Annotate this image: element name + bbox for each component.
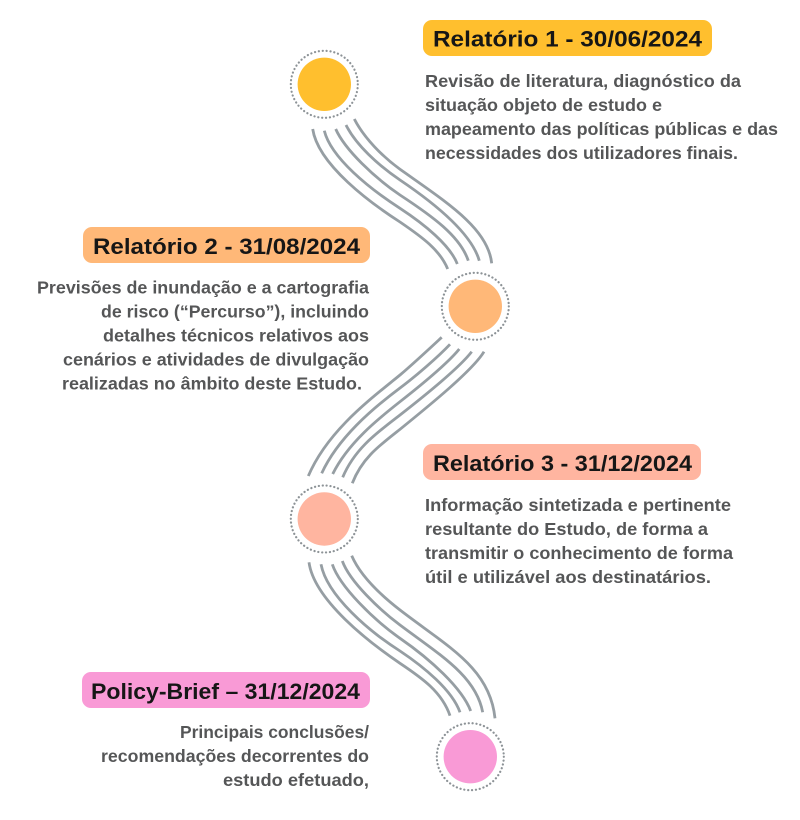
milestone marker 2 — [442, 273, 509, 340]
heading: Relatório 2 — [83, 227, 370, 263]
milestone marker 1 — [291, 51, 358, 118]
text block: Relatório 1 description: Revisão de literatura, diagnóstico da — [425, 71, 741, 91]
text block: Policy-Brief description: estudo efetuado, — [223, 770, 369, 790]
text block: Relatório 3 description — [425, 495, 733, 587]
text block: Relatório 1 description: situação objeto de estudo e — [425, 95, 662, 115]
heading: Relatório 3: Relatório 3 - 31/12/2024 — [433, 451, 692, 476]
text block: Policy-Brief description: recomendações decorrentes do — [101, 746, 369, 766]
text block: Relatório 2 description: realizadas no âmbito deste Estudo. — [62, 374, 362, 394]
heading: Relatório 1 — [423, 20, 712, 56]
text block: Policy-Brief description: Principais conclusões/ — [180, 722, 369, 742]
milestone marker 3 — [291, 486, 358, 552]
heading: Policy-Brief: Policy-Brief – 31/12/2024 — [91, 679, 360, 704]
milestone marker 4 — [437, 723, 504, 790]
heading: Policy-Brief — [82, 672, 370, 708]
wave connector 1 to 2 — [313, 119, 492, 269]
text block: Relatório 2 description: de risco (“Percurso”), incluindo — [101, 302, 369, 322]
wave connector 2 to 3 — [308, 337, 484, 483]
text block: Relatório 2 description: Previsões de inundação e a cartografia — [37, 278, 369, 298]
text block: Relatório 3 description: resultante do Estudo, de forma a — [425, 519, 708, 539]
text block: Relatório 2 description — [37, 278, 369, 394]
wave connector 3 to 4 — [309, 556, 495, 718]
text block: Relatório 3 description: transmitir o conhecimento de forma — [425, 543, 733, 563]
heading: Relatório 3 — [423, 444, 701, 480]
text block: Relatório 1 description: mapeamento das políticas públicas e das — [425, 119, 778, 139]
text block: Relatório 3 description: Informação sintetizada e pertinente — [425, 495, 731, 515]
text block: Relatório 2 description: detalhes técnicos relativos aos — [103, 326, 369, 346]
heading: Relatório 2: Relatório 2 - 31/08/2024 — [93, 234, 361, 259]
text block: Relatório 2 description: cenários e atividades de divulgação — [63, 350, 369, 370]
text block: Policy-Brief description — [101, 722, 369, 790]
text block: Relatório 3 description: útil e utilizável aos destinatários. — [425, 567, 711, 587]
heading: Relatório 1: Relatório 1 - 30/06/2024 — [433, 26, 703, 52]
text block: Relatório 1 description — [425, 71, 778, 163]
text block: Relatório 1 description: necessidades dos utilizadores finais. — [425, 143, 738, 163]
